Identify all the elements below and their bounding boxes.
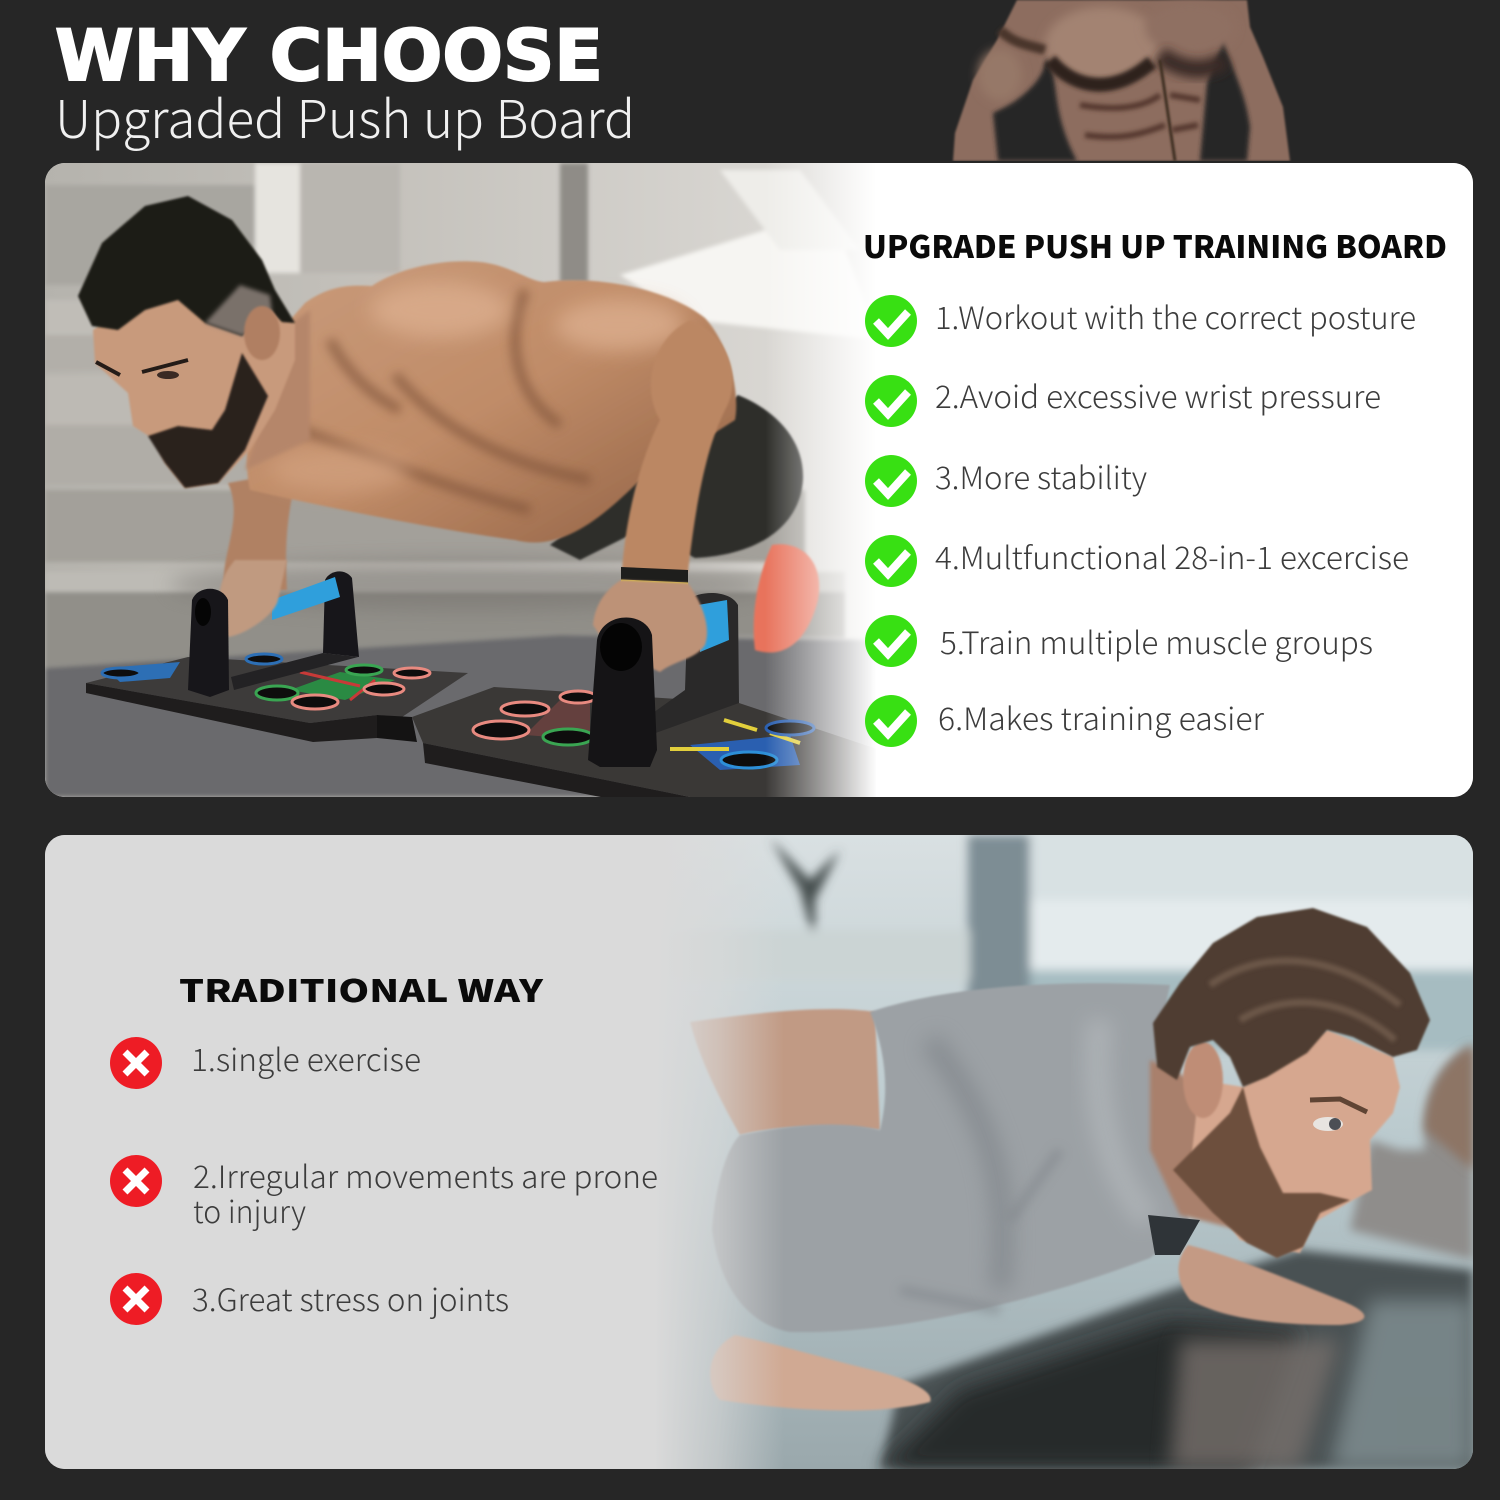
check icon 3 (865, 455, 917, 507)
left handle (188, 560, 359, 697)
hair (1153, 908, 1430, 1087)
benefit 4: 4.Multfunctional 28-in-1 excercise (935, 533, 1409, 578)
lower arm and hand (710, 1335, 931, 1410)
photo: man in grey t-shirt doing push up on floor (45, 835, 1480, 1469)
collar shadow (1148, 1215, 1200, 1255)
title line: why choose: WHY CHOOSE (55, 15, 603, 97)
heading: upgrade push up training board: UPGRADE PUSH UP TRAINING BOARD (863, 222, 1447, 267)
floor (880, 1250, 1473, 1469)
neck (1150, 1060, 1240, 1230)
benefit 3: 3.More stability (935, 453, 1147, 498)
benefit 6 (865, 694, 1265, 747)
faded side hair (205, 285, 272, 336)
blue grip left (272, 577, 340, 620)
muscle shading (300, 290, 590, 510)
drawback 3: 3.Great stress on joints (192, 1275, 509, 1320)
left hand (219, 560, 287, 637)
beard (1173, 1087, 1350, 1258)
drawback 1 (110, 1035, 421, 1089)
wrist band (621, 567, 688, 584)
eye and brow (1310, 1099, 1367, 1131)
ear (1183, 1042, 1223, 1118)
check icon 5 (865, 615, 917, 667)
check icon 2 (865, 375, 917, 427)
ear (244, 306, 280, 360)
left arm (222, 478, 292, 591)
t-shirt (712, 983, 1190, 1332)
background person (1350, 1045, 1473, 1260)
blue grip right (698, 600, 729, 652)
drawback 2 (110, 1152, 658, 1232)
shadow under man (170, 560, 770, 610)
right hand (1178, 1245, 1364, 1325)
heading: traditional way: TRADITIONAL WAY (179, 966, 544, 1011)
drawback 1: 1.single exercise (191, 1035, 421, 1080)
drawback 2: to injury (193, 1187, 306, 1232)
title (55, 15, 635, 153)
photo: muscular torso (953, 0, 1290, 161)
benefit 1: 1.Workout with the correct posture (935, 293, 1416, 338)
check icon 6 (865, 695, 917, 747)
face (1190, 1030, 1400, 1253)
fade to grey (45, 835, 784, 1469)
panel: traditional way (45, 835, 1480, 1469)
check icon 4 (865, 535, 917, 587)
subtitle: Upgraded Push up Board (55, 78, 635, 153)
hair (78, 196, 295, 336)
benefit 3 (865, 453, 1147, 507)
head and face (93, 290, 295, 488)
cross icon 1 (110, 1037, 162, 1089)
benefit 5: 5.Train multiple muscle groups (940, 618, 1373, 663)
right hand (593, 580, 707, 672)
cross icon 3 (110, 1273, 162, 1325)
fade to white (765, 163, 877, 797)
drawback 3 (110, 1273, 509, 1325)
photo: man doing push ups on board (45, 163, 1476, 798)
panel: upgraded push up training board (45, 163, 1476, 798)
torso (247, 261, 736, 543)
shoe (754, 544, 819, 653)
neck (245, 310, 310, 470)
board (86, 654, 880, 798)
drawback 2: 2.Irregular movements are prone (193, 1152, 658, 1197)
right handle (588, 580, 739, 767)
brow and eye (96, 360, 188, 379)
cross icon 2 (110, 1155, 162, 1207)
left arm (690, 1009, 880, 1135)
benefit 2: 2.Avoid excessive wrist pressure (935, 372, 1381, 417)
right arm (622, 320, 732, 572)
benefit 2 (865, 372, 1381, 427)
beard (148, 353, 268, 488)
shorts (550, 395, 803, 560)
benefit 6: 6.Makes training easier (938, 694, 1265, 739)
check icon 1 (865, 295, 917, 347)
